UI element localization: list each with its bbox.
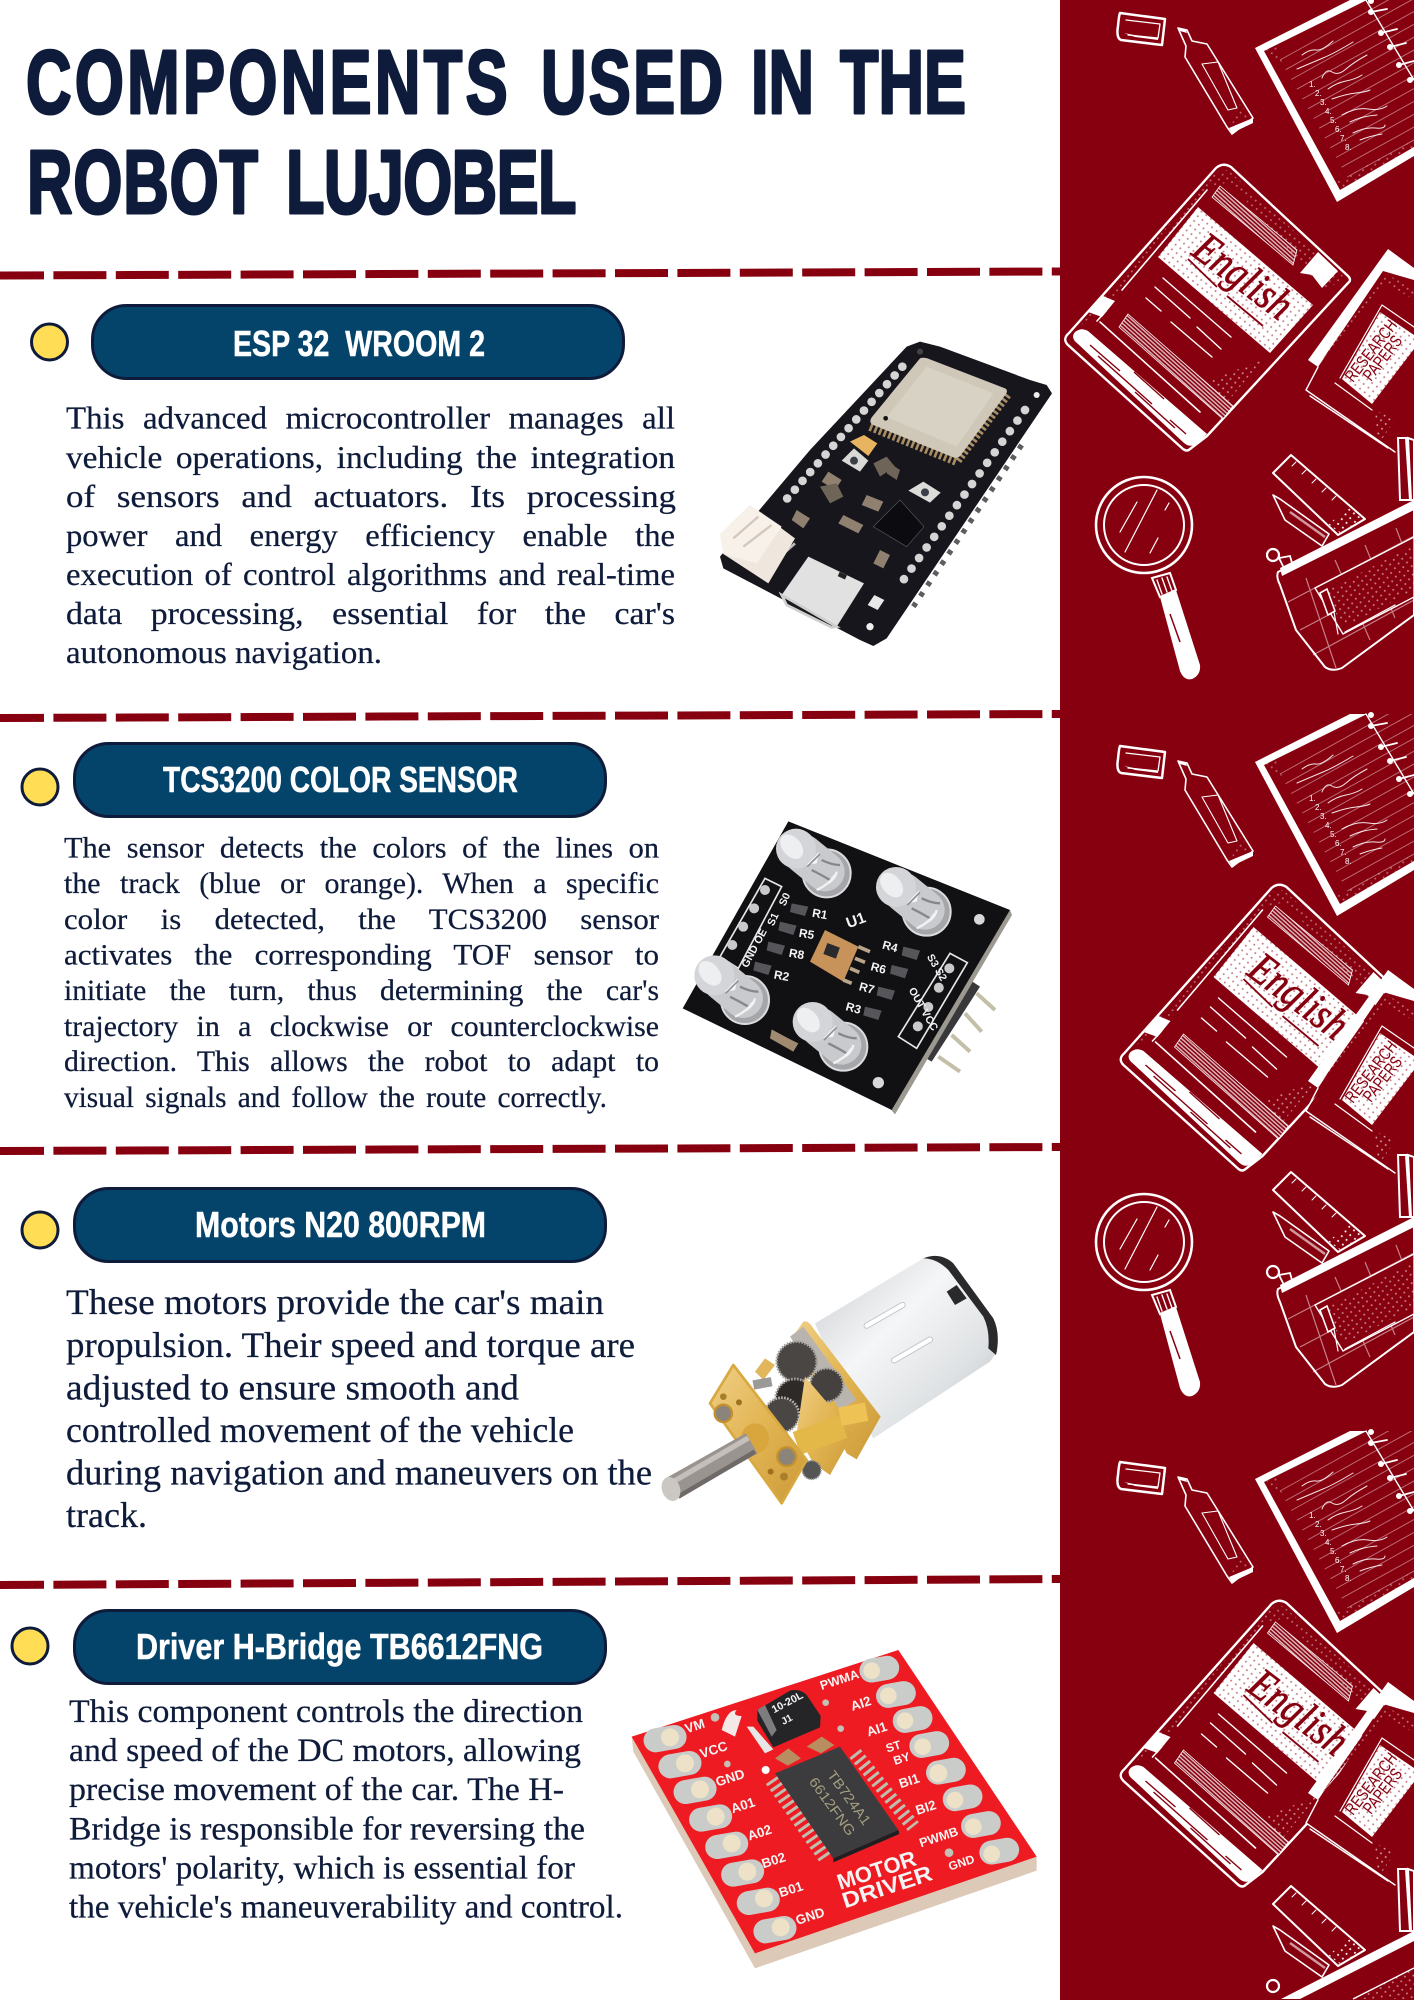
photo: TB6612FNG motor driver board: PWMA [818, 1667, 861, 1693]
text block: ESP32 description: data processing, essential for the car's [66, 595, 675, 631]
photo: TCS3200 color sensor: R8 [788, 946, 806, 962]
text block: ESP32 description: This advanced microcontroller manages all [66, 400, 675, 436]
photo: TCS3200 color sensor: R1 [811, 906, 829, 922]
text block: H-bridge description: motors' polarity, which is essential for [69, 1850, 575, 1886]
photo: TB6612FNG motor driver board: B01 [777, 1878, 805, 1900]
photo: TB6612FNG motor driver board: J1 [780, 1713, 795, 1728]
photo: TCS3200 color sensor [683, 821, 1012, 1114]
photo: TB6612FNG motor driver board: A02 [746, 1822, 774, 1844]
icon: notebook, second: 5. [1330, 830, 1337, 839]
icon: highlighter and cap, third [1117, 1462, 1253, 1583]
icon: pencil case, first [1267, 438, 1414, 670]
text block: H-bridge description: and speed of the DC motors, allowing [69, 1733, 581, 1769]
icon: notebook, third: 7. [1340, 1565, 1347, 1574]
photo: TB6612FNG motor driver board: PWMB [918, 1824, 960, 1850]
title [26, 33, 966, 233]
photo: TB6612FNG motor driver board [632, 1650, 1037, 1968]
text block: ESP32 description: of sensors and actuators. Its processing [66, 478, 676, 514]
photo: TCS3200 color sensor: R4 [881, 938, 900, 955]
icon: notebook, second: 1. [1309, 794, 1316, 803]
icon: English book, third [1121, 1601, 1406, 1886]
title: THE [840, 33, 966, 133]
icon: English book, first [1065, 165, 1350, 450]
text block: H-bridge description: the vehicle's maneuverability and control. [69, 1890, 623, 1926]
icon: notebook, first: 2. [1315, 89, 1322, 98]
icon: notebook, second: 8. [1345, 857, 1352, 866]
text block: color sensor description: trajectory in a clockwise or counterclockwise [64, 1010, 659, 1043]
photo: TB6612FNG motor driver board: GND [794, 1904, 827, 1928]
photo: TCS3200 color sensor: GND OE [739, 927, 770, 970]
photo: TCS3200 color sensor: OUT VCC [906, 985, 940, 1033]
photo: TB6612FNG motor driver board: VCC [698, 1738, 730, 1761]
dashed dividers [0, 272, 1060, 1585]
title: COMPONENTS [26, 33, 508, 133]
title: USED [541, 33, 723, 133]
icon: notebook, first: 7. [1340, 134, 1347, 143]
photo: TCS3200 color sensor: R5 [798, 926, 816, 942]
icon: notebook, third: 8. [1345, 1574, 1352, 1583]
icon: research papers folder, third: RESEARCH [1341, 1749, 1401, 1818]
heading pill: Motors N20 800RPM [74, 1188, 606, 1262]
text block: color sensor description: the track (blue or orange). When a specific [64, 867, 659, 900]
panel: decorative study-supplies pattern [1060, 0, 1414, 2000]
icon: notebook, third: 2. [1315, 1520, 1322, 1529]
text block: motors description: during navigation and maneuvers on the [66, 1452, 652, 1492]
icon: notebook, third: 5. [1330, 1547, 1337, 1556]
heading pill: ESP 32 WROOM 2: ESP 32 WROOM 2 [233, 323, 485, 364]
icon: magnifying glass, first [1096, 477, 1200, 679]
text block: color sensor description: The sensor detects the colors of the lines on [64, 832, 659, 864]
icon: notebook, third: 3. [1320, 1529, 1327, 1538]
photo: TCS3200 color sensor: S3 S2 [924, 952, 949, 983]
icon: notebook, second: 3. [1320, 812, 1327, 821]
text block: color sensor description [64, 832, 659, 1114]
icon: English book, second: English [1239, 942, 1358, 1049]
icon: notebook, third: 4. [1325, 1538, 1332, 1547]
photo: TB6612FNG motor driver board: BI2 [914, 1797, 938, 1818]
photo: TCS3200 color sensor: U1 [844, 909, 869, 932]
icon: research papers folder, third [1306, 1682, 1414, 1913]
title: ROBOT [27, 133, 258, 233]
icon: notebook, third: 6. [1335, 1556, 1342, 1565]
text block: ESP32 description: autonomous navigation. [66, 634, 382, 670]
heading pill: TCS3200 COLOR SENSOR [74, 744, 606, 816]
icon: notebook, first [1255, 0, 1414, 202]
icon: highlighter and cap, first [1117, 13, 1253, 134]
photo: TB6612FNG motor driver board: AI2 [849, 1693, 873, 1714]
icon: notebook, first: 4. [1325, 107, 1332, 116]
heading pill: ESP 32 WROOM 2 [92, 306, 624, 378]
icon: notebook, second: 6. [1335, 839, 1342, 848]
icon: pencil case, second [1267, 1155, 1414, 1387]
heading pill: TCS3200 COLOR SENSOR: TCS3200 COLOR SENSOR [163, 759, 518, 800]
photo: TB6612FNG motor driver board: MOTOR [834, 1846, 919, 1895]
photo: ESP32 board [720, 342, 1052, 646]
icon: notebook, third: 1. [1309, 1511, 1316, 1520]
icon: research papers folder, first: RESEARCH [1341, 316, 1401, 385]
text block: H-bridge description: Bridge is responsible for reversing the [69, 1812, 585, 1848]
photo: TB6612FNG motor driver board: A01 [729, 1794, 757, 1816]
icon: notebook, first: 5. [1330, 116, 1337, 125]
heading pill: Motors N20 800RPM: Motors N20 800RPM [195, 1204, 486, 1245]
text block: motors description: These motors provide the car's main [66, 1282, 604, 1322]
icon: highlighter and cap, second [1117, 746, 1253, 867]
icon: notebook, second: 2. [1315, 803, 1322, 812]
icon: notebook, second: 4. [1325, 821, 1332, 830]
text block: H-bridge description: This component controls the direction [69, 1694, 583, 1730]
text block: color sensor description: color is detected, the TCS3200 sensor [64, 903, 659, 936]
photo: TCS3200 color sensor: S1 [765, 911, 782, 928]
icon: notebook, second [1255, 702, 1414, 916]
text block: H-bridge description: precise movement of the car. The H- [69, 1772, 564, 1808]
text block: color sensor description: initiate the turn, thus determining the car's [64, 974, 659, 1007]
title: LUJOBEL [286, 133, 577, 233]
text block: motors description: track. [66, 1495, 147, 1535]
text block: color sensor description: visual signals and follow the route correctly. [64, 1081, 607, 1114]
text block: ESP32 description [66, 400, 676, 670]
bullet dot 1 [32, 324, 68, 360]
icon: notebook, first: 8. [1345, 143, 1352, 152]
heading pill: Driver H-Bridge TB6612FNG: Driver H-Bridge TB6612FNG [136, 1626, 543, 1667]
photo: TB6612FNG motor driver board: 6612FNG [806, 1774, 859, 1839]
icon: English book, first: English [1183, 222, 1303, 329]
icon: notebook, second: 7. [1340, 848, 1347, 857]
text block: motors description: propulsion. Their speed and torque are [66, 1325, 635, 1365]
bullet dot 4 [12, 1628, 48, 1664]
photo: TB6612FNG motor driver board: 10-20L [770, 1689, 806, 1716]
photo: TCS3200 color sensor: R7 [858, 979, 876, 997]
photo: TCS3200 color sensor: R2 [773, 967, 791, 984]
photo: TB6612FNG motor driver board: VM [683, 1716, 707, 1736]
text block: color sensor description: direction. This allows the robot to adapt to [64, 1045, 659, 1078]
title: IN [751, 33, 814, 133]
text block: ESP32 description: power and energy efficiency enable the [66, 517, 675, 553]
icon: research papers folder, first [1306, 249, 1414, 480]
text block: H-bridge description [69, 1694, 623, 1926]
icon: notebook, first: 3. [1320, 98, 1327, 107]
photo: TCS3200 color sensor: S0 [777, 891, 793, 908]
bullet dot 3 [22, 1212, 58, 1248]
photo: TB6612FNG motor driver board: BY [892, 1749, 912, 1768]
icon: magnifying glass, second [1096, 1194, 1200, 1396]
photo: TB6612FNG motor driver board: AI1 [865, 1719, 890, 1740]
photo: TCS3200 color sensor: R6 [869, 959, 888, 977]
icon: pencil case, third, cropped at the page bottom [1267, 1869, 1414, 1999]
photo: TB6612FNG motor driver board: GND [714, 1766, 747, 1790]
photo: TB6612FNG motor driver board: DRIVER [839, 1860, 935, 1913]
photo: TB6612FNG motor driver board: GND [947, 1852, 977, 1874]
photo: TB6612FNG motor driver board: BI1 [897, 1770, 922, 1791]
icon: notebook, first: 6. [1335, 125, 1342, 134]
text block: motors description [66, 1282, 652, 1535]
photo: TB6612FNG motor driver board: ST [884, 1737, 903, 1756]
photo: N20 gear motor [658, 1256, 998, 1504]
bullet dot 2 [22, 769, 58, 805]
icon: research papers folder, second [1306, 970, 1414, 1201]
heading pill: Driver H-Bridge TB6612FNG [74, 1610, 606, 1684]
photo: TCS3200 color sensor: R3 [844, 999, 863, 1017]
icon: research papers folder, second: RESEARCH [1341, 1037, 1401, 1106]
text block: color sensor description: activates the corresponding TOF sensor to [64, 938, 659, 972]
text block: motors description: controlled movement of the vehicle [66, 1410, 574, 1450]
icon: English book, second [1121, 885, 1406, 1170]
photo: TB6612FNG motor driver board: B02 [760, 1849, 788, 1871]
photo: TB6612FNG motor driver board: TB724A1 [824, 1767, 875, 1828]
icon: notebook, third [1255, 1419, 1414, 1633]
text block: ESP32 description: vehicle operations, including the integration [66, 439, 675, 475]
icon: English book, third: English [1239, 1658, 1358, 1765]
text block: motors description: adjusted to ensure smooth and [66, 1368, 519, 1408]
icon: notebook, first: 1. [1309, 80, 1316, 89]
text block: ESP32 description: execution of control algorithms and real-time [66, 556, 675, 592]
